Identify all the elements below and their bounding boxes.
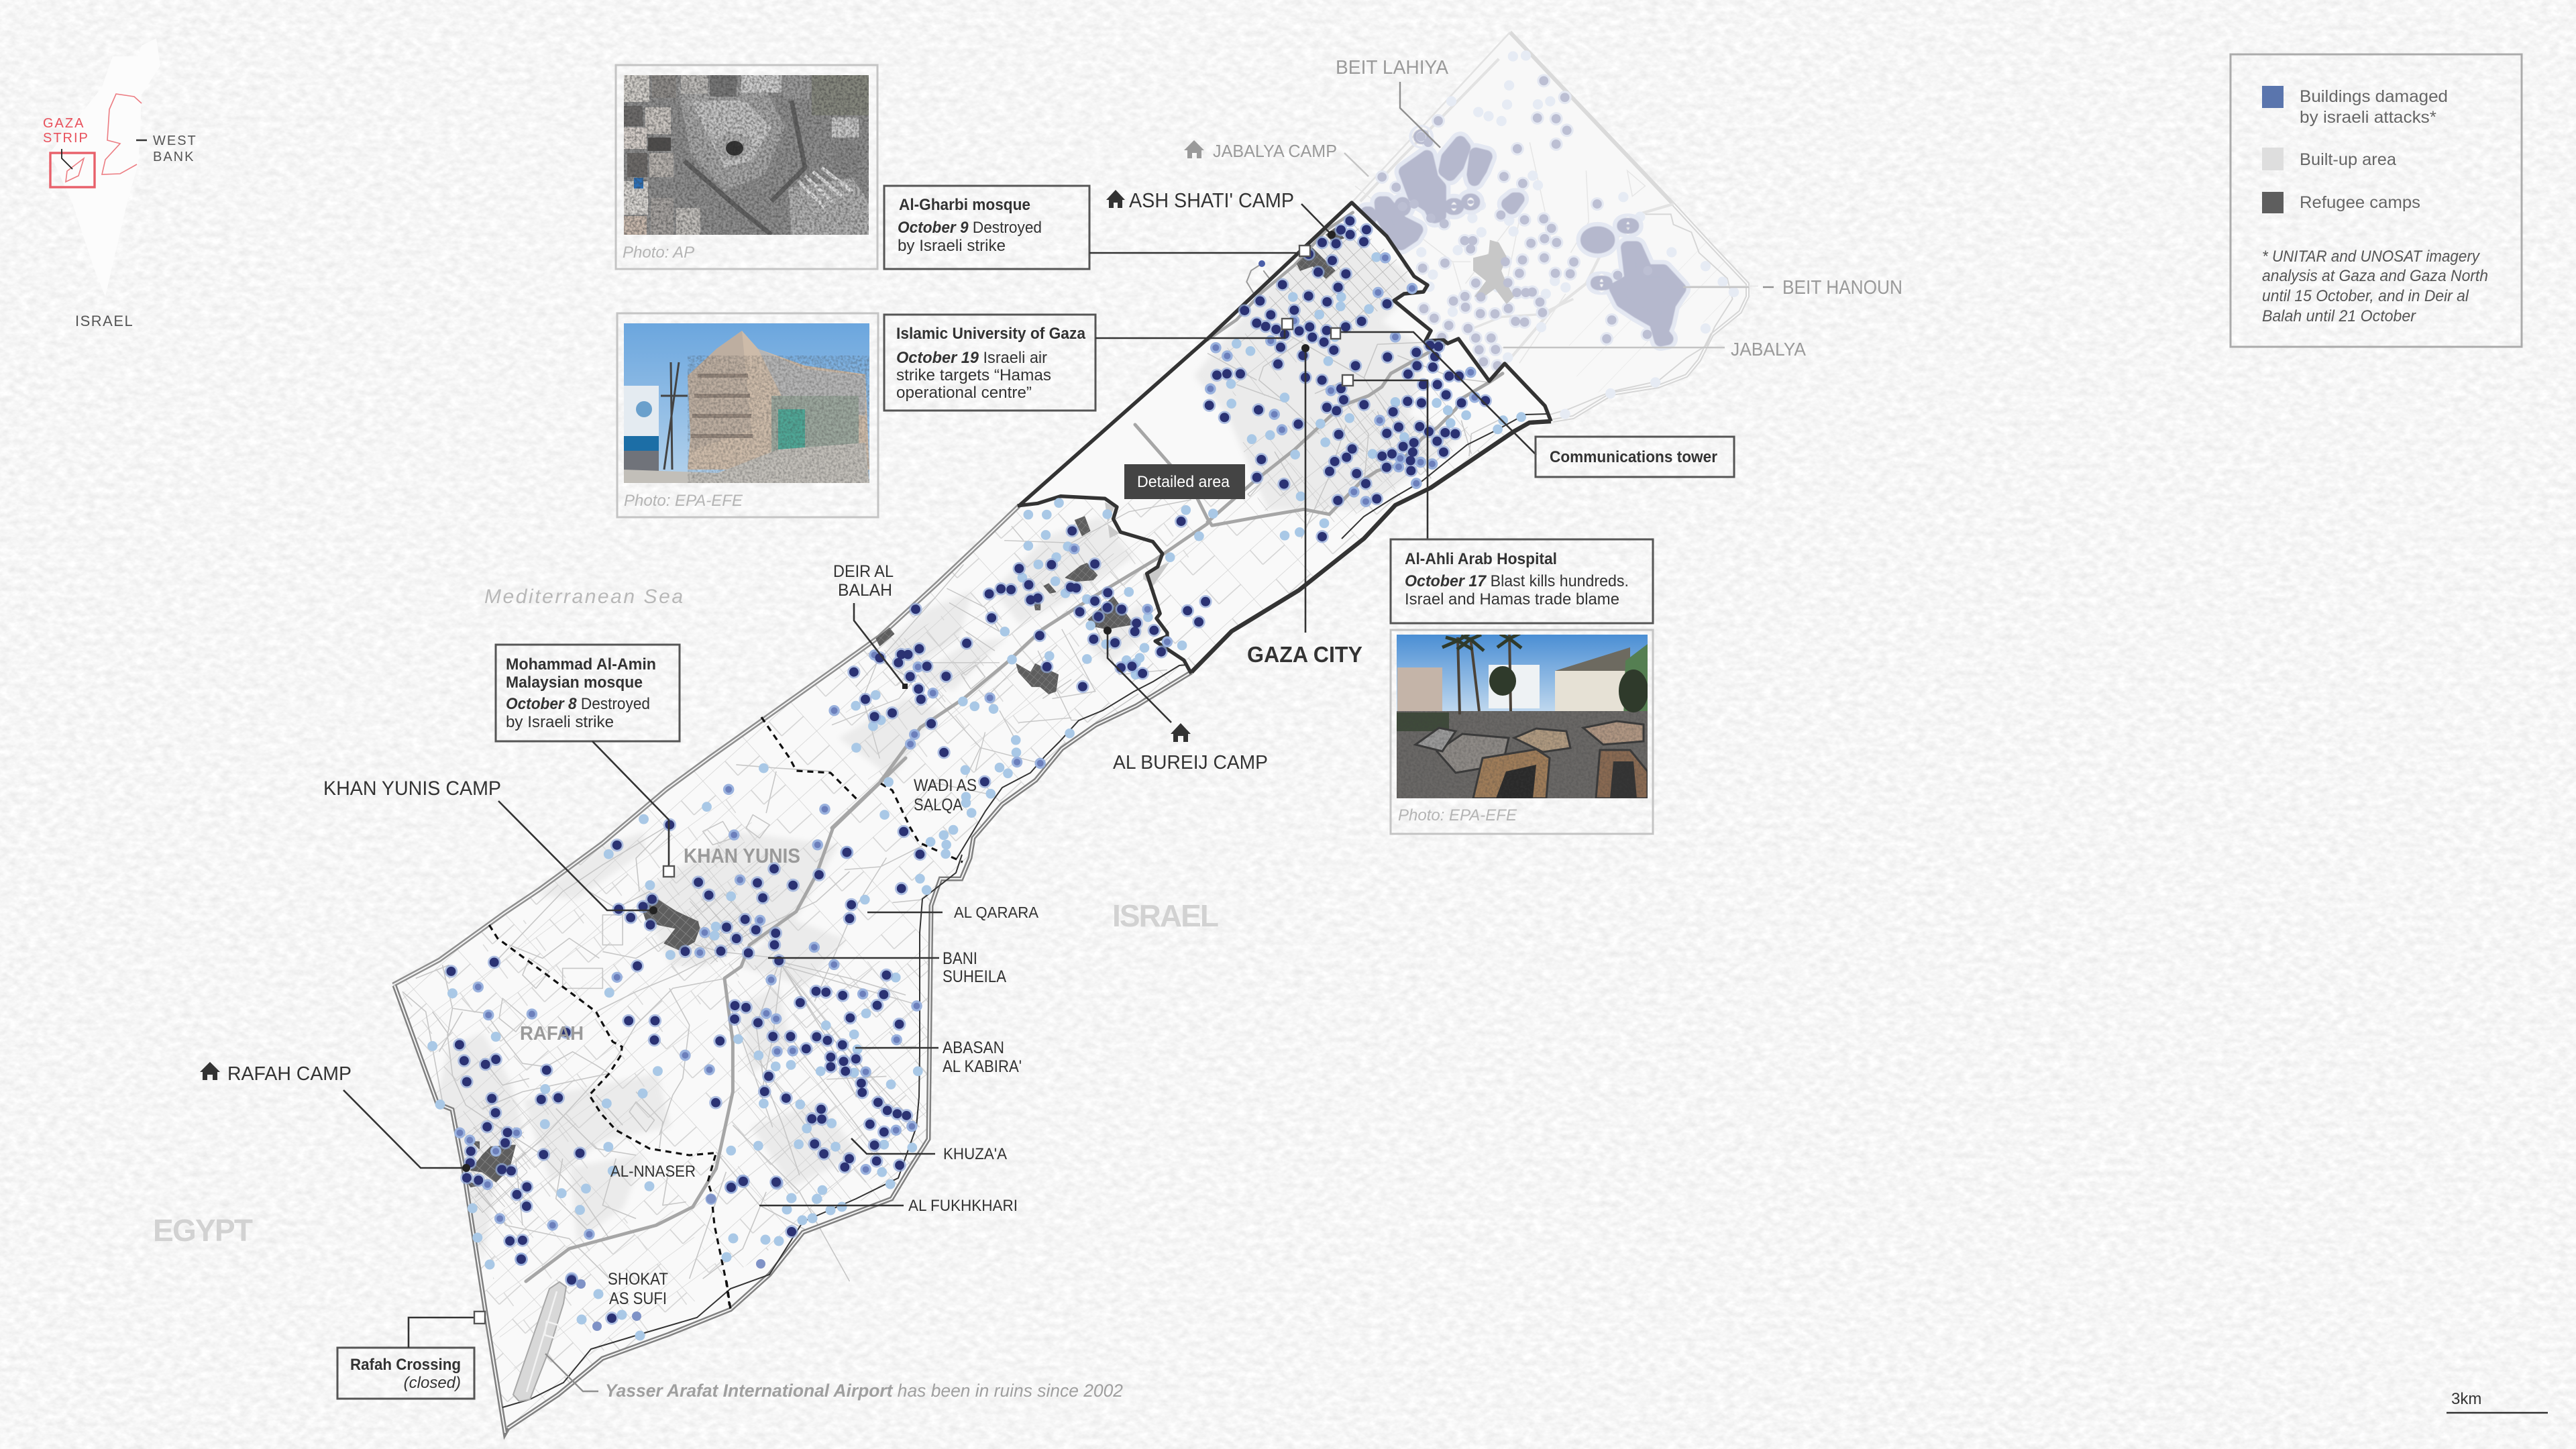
label: Rafah: RAFAH — [520, 1023, 584, 1044]
callout: Mohammad Al-Amin Malaysian mosque: Mohammad Al-Amin — [506, 655, 656, 674]
label: Bani Suheila: BANI — [943, 949, 977, 968]
callout: Mohammad Al-Amin Malaysian mosque: Malaysian mosque — [506, 674, 643, 692]
locator: Israel shape — [50, 38, 160, 297]
label: Rafah Camp: RAFAH CAMP — [227, 1063, 352, 1085]
locator: West Bank label: WEST — [153, 133, 197, 148]
leader: Islamic University of Gaza — [1095, 329, 1285, 338]
callout: Al-Gharbi mosque: Al-Gharbi mosque — [899, 196, 1030, 214]
legend: footnote: analysis at Gaza and Gaza North — [2262, 267, 2488, 285]
callout: Al-Gharbi mosque: October 9 Destroyed — [898, 219, 1042, 237]
label: Egypt: EGYPT — [153, 1213, 255, 1248]
callout: Communications tower: Communications tower — [1550, 448, 1717, 466]
label: Jabalya: JABALYA — [1731, 339, 1806, 360]
legend: built-up area — [2262, 148, 2396, 170]
damaged buildings — [433, 221, 1521, 1336]
label: Detailed area — [1124, 464, 1245, 499]
north strip border — [1510, 32, 1673, 204]
legend: buildings damaged: Buildings damaged — [2300, 87, 2448, 106]
callout: Islamic University of Gaza: strike targets “Hamas — [896, 366, 1051, 384]
callout: Al-Gharbi mosque — [884, 186, 1089, 269]
label: Khan Yunis Camp: KHAN YUNIS CAMP — [323, 777, 501, 800]
label: Wadi as Salqa: WADI AS — [914, 776, 977, 795]
built-up areas and street grids — [393, 221, 1551, 1433]
label: Jabalya Camp: JABALYA CAMP — [1213, 141, 1337, 161]
locator: Israel label: ISRAEL — [75, 313, 133, 329]
leader: Rafah Crossing — [409, 1318, 474, 1348]
label: Deir al Balah: DEIR AL — [833, 562, 894, 581]
marker: Malaysian mosque — [663, 866, 674, 877]
label: Al Fukhkhari: AL FUKHKHARI — [908, 1197, 1018, 1215]
refugee camp: Jabalya — [1473, 240, 1514, 304]
callout: Islamic University of Gaza: October 19 Israeli air — [896, 349, 1047, 367]
locator: Gaza Strip frame — [50, 149, 95, 187]
label: Israel: ISRAEL — [1112, 898, 1221, 933]
legend: footnote: * UNITAR and UNOSAT imagery — [2262, 248, 2481, 266]
locator map — [43, 38, 197, 329]
label: Rafah Camp — [200, 1062, 470, 1172]
scale bar: 3km — [2451, 1390, 2481, 1408]
photo card: Al-Ahli Arab Hospital — [1391, 630, 1653, 834]
callout: Al-Ahli Arab Hospital: Al-Ahli Arab Hospital — [1405, 550, 1557, 568]
label: Mediterranean Sea: Mediterranean Sea — [484, 586, 683, 608]
main roads — [526, 758, 906, 1281]
refugee camps — [468, 228, 1344, 1187]
label: Beit Hanoun: BEIT HANOUN — [1782, 277, 1902, 299]
strip land — [393, 203, 1551, 1433]
label: Wadi as Salqa: SALQA — [914, 796, 963, 814]
local roads — [402, 765, 906, 1281]
callout: Mohammad Al-Amin Malaysian mosque — [496, 645, 680, 741]
marker: Al-Ahli Arab Hospital — [1342, 375, 1353, 386]
label: Detailed area: Detailed area — [1137, 473, 1230, 491]
label: Yasser Arafat International Airport — [545, 1354, 1123, 1401]
callout: Al-Ahli Arab Hospital: October 17 Blast kills hundreds. — [1405, 572, 1629, 590]
marker: Rafah Crossing — [474, 1311, 485, 1324]
callout: Rafah Crossing — [337, 1348, 474, 1399]
photo card: Islamic University of Gaza: Photo: EPA-EFE — [624, 492, 743, 510]
label: Deir al Balah: BALAH — [838, 581, 892, 600]
callout: Communications tower — [1536, 437, 1734, 477]
label: Yasser Arafat International Airport: Yasser Arafat International Airport has been in ruins since 2002 — [605, 1381, 1123, 1401]
airport — [513, 1282, 566, 1401]
photo card: Islamic University of Gaza — [617, 313, 878, 517]
locator: Gaza Strip label: GAZA — [43, 116, 85, 131]
label: Jabalya Camp — [1184, 140, 1368, 176]
photo card: Al-Ahli Arab Hospital: Photo: EPA-EFE — [1398, 806, 1517, 824]
legend: refugee camps: Refugee camps — [2300, 193, 2420, 212]
legend: buildings damaged: by israeli attacks* — [2300, 108, 2436, 127]
photo card: Al-Gharbi mosque: Photo: AP — [623, 244, 694, 262]
legend: buildings damaged — [2262, 86, 2448, 127]
leader: Al-Ahli Arab Hospital — [1353, 380, 1428, 539]
callout: Islamic University of Gaza: Islamic University of Gaza — [896, 325, 1086, 343]
governorate boundaries (dashed) — [489, 717, 963, 1309]
label: Al Bureij Camp: AL BUREIJ CAMP — [1113, 752, 1268, 773]
label: Khuza'a: KHUZA'A — [943, 1145, 1007, 1163]
leader: Malaysian mosque — [592, 741, 669, 865]
coast road and shore — [393, 506, 1019, 985]
label: Al Qarara: AL QARARA — [954, 904, 1039, 921]
leader: Communications tower — [1340, 332, 1536, 455]
north roads — [1355, 56, 1758, 415]
shoreline inner line — [502, 855, 962, 1407]
callout: Al-Ahli Arab Hospital: Israel and Hamas trade blame — [1405, 590, 1619, 608]
legend: footnote: Balah until 21 October — [2262, 307, 2416, 325]
callout: Al-Gharbi mosque: by Israeli strike — [898, 237, 1006, 255]
map: north Gaza (faded area) — [1352, 32, 1758, 421]
leader: Al-Gharbi mosque — [1089, 252, 1299, 254]
callout: Rafah Crossing: (closed) — [404, 1374, 461, 1392]
label: Shokat as Sufi: SHOKAT — [608, 1270, 668, 1289]
photo card: Al-Gharbi mosque — [616, 65, 877, 269]
marker: Islamic University of Gaza — [1282, 319, 1293, 329]
legend panel — [2231, 54, 2522, 347]
label: Shokat as Sufi — [608, 1270, 668, 1308]
label: Al Bureij Camp — [1104, 627, 1268, 773]
label: Al-Nnaser: AL-NNASER — [610, 1163, 696, 1181]
locator: West Bank label: BANK — [153, 150, 195, 164]
marker: Al-Gharbi mosque — [1299, 246, 1310, 256]
locator: Gaza Strip label: STRIP — [43, 131, 89, 146]
label: Khan Yunis Camp — [323, 777, 657, 914]
legend: built-up area: Built-up area — [2300, 150, 2396, 169]
damage clusters — [1366, 136, 1680, 340]
callout: Rafah Crossing: Rafah Crossing — [350, 1356, 461, 1374]
label: Abasan al Kabira — [855, 1038, 1022, 1076]
label: Abasan al Kabira: AL KABIRA' — [943, 1057, 1022, 1076]
legend: refugee camps — [2262, 192, 2420, 213]
label: Khuza'a — [851, 1138, 1007, 1163]
detailed area border — [1018, 203, 1551, 674]
callout: Al-Ahli Arab Hospital — [1391, 539, 1653, 623]
locator: West Bank outline — [102, 94, 142, 174]
label: Ash Shati' Camp — [1106, 189, 1336, 239]
north strip land — [1352, 32, 1748, 421]
label: Khan Yunis: KHAN YUNIS — [684, 844, 800, 867]
label: Abasan al Kabira: ABASAN — [943, 1038, 1004, 1057]
label: Beit Lahiya: BEIT LAHIYA — [1336, 57, 1449, 78]
label: Ash Shati' Camp: ASH SHATI' CAMP — [1129, 189, 1294, 212]
marker: Communications tower — [1331, 328, 1340, 339]
legend: footnote: until 15 October, and in Deir al — [2262, 287, 2469, 305]
locator: West Bank label — [136, 133, 197, 164]
label: Bani Suheila — [768, 949, 1006, 986]
callout: Islamic University of Gaza: operational centre” — [896, 384, 1032, 402]
label: Beit Lahiya — [1336, 57, 1449, 148]
label: Wadi as Salqa — [914, 776, 977, 814]
label: Gaza City: GAZA CITY — [1247, 642, 1362, 667]
callout: Mohammad Al-Amin Malaysian mosque: October 8 Destroyed — [506, 695, 650, 713]
legend: footnote — [2262, 248, 2488, 325]
callout: Mohammad Al-Amin Malaysian mosque: by Israeli strike — [506, 713, 614, 731]
label: Shokat as Sufi: AS SUFI — [609, 1289, 667, 1308]
label: Deir al Balah — [833, 562, 908, 689]
map: south and central Gaza — [393, 203, 1551, 1433]
callout: Islamic University of Gaza — [884, 315, 1095, 411]
label: Gaza City — [1247, 344, 1362, 667]
label: Bani Suheila: SUHEILA — [943, 967, 1006, 986]
